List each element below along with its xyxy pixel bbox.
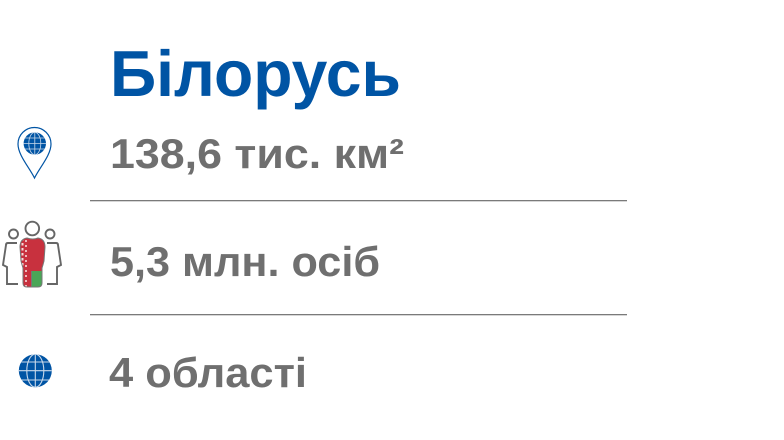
title: Білорусь [110,37,401,110]
divider 2 [90,314,627,315]
regions text: 4 області [109,349,307,396]
population text: 5,3 млн. осіб [110,238,380,285]
icon: map pin with globe [18,128,51,178]
icon: globe [18,353,53,388]
divider 1 [90,200,627,201]
icon: three people with Belarus flag [3,222,61,288]
area text: 138,6 тис. км² [110,130,404,177]
